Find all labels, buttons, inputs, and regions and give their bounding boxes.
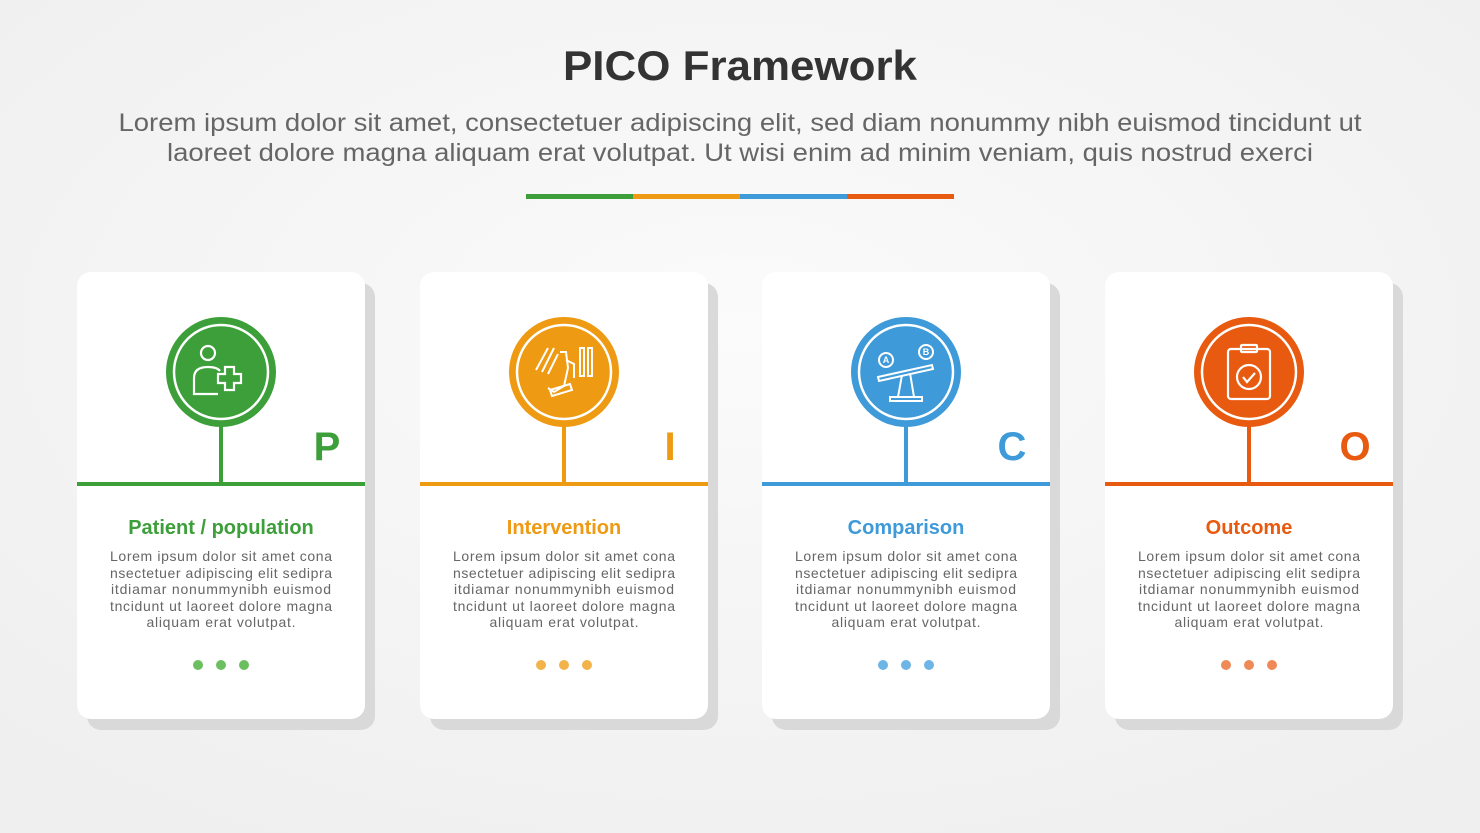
letter: C [998, 425, 1026, 469]
text block: aliquam erat volutpat. [490, 614, 638, 630]
text block: aliquam erat volutpat. [1174, 614, 1324, 630]
text block: itdiamar nonummynibh euismod [454, 581, 674, 597]
dots [193, 660, 249, 670]
subtitle [118, 109, 1362, 167]
heading: Patient / population [128, 517, 314, 539]
text block [110, 548, 332, 630]
icon: seesaw: A [883, 355, 890, 365]
dots [536, 660, 592, 670]
subtitle: Lorem ipsum dolor sit amet, consectetuer adipiscing elit, sed diam nonummy nibh euismod tincidunt ut [118, 109, 1362, 137]
panel: comparison [762, 272, 1060, 730]
text block: nsectetuer adipiscing elit sedipra [1138, 565, 1360, 581]
subtitle: laoreet dolore magna aliquam erat volutpat. Ut wisi enim ad minim veniam, quis nostrud exerci [167, 139, 1313, 167]
text block: tncidunt ut laoreet dolore magna [453, 598, 675, 614]
text block: aliquam erat volutpat. [146, 614, 296, 630]
text block: itdiamar nonummynibh euismod [1139, 581, 1359, 597]
text block: Lorem ipsum dolor sit amet cona [795, 548, 1017, 564]
text block [795, 548, 1017, 630]
icon: person plus [166, 317, 276, 486]
text block: aliquam erat volutpat. [832, 614, 980, 630]
heading: Comparison [848, 517, 964, 539]
text block [1138, 548, 1360, 630]
text block: nsectetuer adipiscing elit sedipra [795, 565, 1017, 581]
text block: tncidunt ut laoreet dolore magna [795, 598, 1017, 614]
text block: tncidunt ut laoreet dolore magna [110, 598, 332, 614]
panel: outcome [1105, 272, 1403, 730]
text block: Lorem ipsum dolor sit amet cona [1138, 548, 1360, 564]
dots [878, 660, 934, 670]
text block: Lorem ipsum dolor sit amet cona [110, 548, 332, 564]
title: PICO Framework [563, 42, 918, 89]
dots [1221, 660, 1277, 670]
letter: O [1339, 425, 1371, 469]
text block: Lorem ipsum dolor sit amet cona [453, 548, 675, 564]
text block: tncidunt ut laoreet dolore magna [1138, 598, 1360, 614]
heading: Intervention [507, 517, 621, 539]
panel: patient [77, 272, 375, 730]
icon: clipboard check [1194, 317, 1304, 486]
text block: nsectetuer adipiscing elit sedipra [453, 565, 675, 581]
letter: P [314, 425, 340, 469]
icon: hand [509, 317, 619, 486]
color divider bar [526, 194, 954, 199]
heading: Outcome [1206, 517, 1292, 539]
icon: seesaw: B [923, 347, 930, 357]
text block: itdiamar nonummynibh euismod [796, 581, 1016, 597]
panel: intervention [420, 272, 718, 730]
text block: nsectetuer adipiscing elit sedipra [110, 565, 332, 581]
text block [453, 548, 675, 630]
icon: seesaw [851, 317, 961, 486]
letter: I [664, 425, 676, 469]
text block: itdiamar nonummynibh euismod [111, 581, 331, 597]
